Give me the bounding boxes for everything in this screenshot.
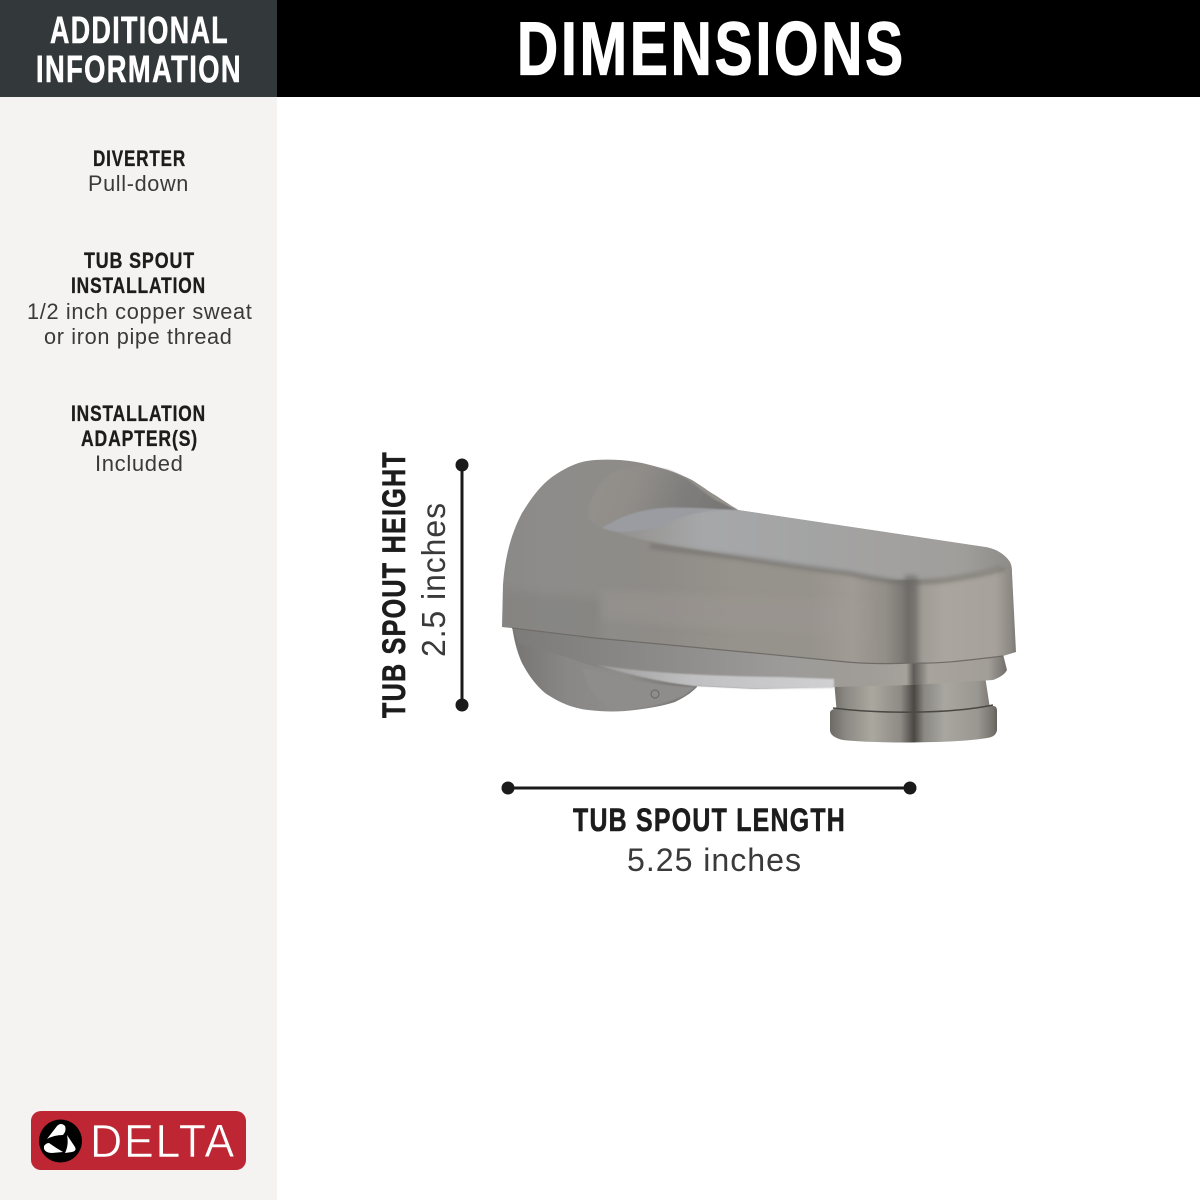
spec: tub spout installation: 1/2 inch copper sweat bbox=[27, 299, 252, 324]
body bottom seam bbox=[512, 628, 1003, 664]
spec: tub spout installation: or iron pipe thread bbox=[44, 324, 232, 349]
spec: tub spout installation: TUB SPOUT bbox=[84, 248, 195, 273]
spec: installation adapters: INSTALLATION bbox=[71, 401, 206, 426]
dark vertical reflection bbox=[905, 575, 917, 665]
length label bbox=[573, 802, 846, 878]
spec: tub spout installation: INSTALLATION bbox=[71, 273, 206, 298]
header: dimensions bbox=[277, 0, 1200, 97]
header: additional information: INFORMATION bbox=[36, 49, 242, 91]
wall plate lower part bbox=[512, 620, 700, 712]
sidebar panel bbox=[0, 97, 277, 1200]
height dimension line bbox=[456, 458, 468, 712]
spec: installation adapters: ADAPTER(S) bbox=[81, 426, 198, 451]
nozzle ring bbox=[830, 706, 997, 742]
lower scoop on wall plate bbox=[583, 668, 696, 709]
length label: TUB SPOUT LENGTH bbox=[573, 802, 846, 838]
delta logo: DELTA bbox=[90, 1115, 236, 1167]
delta logo bbox=[31, 1111, 246, 1170]
groove bbox=[833, 705, 993, 712]
spec: diverter: Pull-down bbox=[88, 171, 189, 196]
logo stamp on plate bbox=[651, 690, 659, 698]
underside light streak bbox=[597, 665, 834, 689]
length dimension line bbox=[502, 782, 916, 794]
ridge shadow bbox=[650, 546, 1005, 582]
nozzle neck bbox=[834, 676, 991, 715]
lip under the body bbox=[513, 627, 1007, 689]
height label: 2.5 inches bbox=[415, 502, 452, 657]
tub spout product illustration bbox=[495, 450, 1025, 742]
spec: diverter bbox=[88, 146, 189, 196]
header: additional information: ADDITIONAL bbox=[50, 10, 229, 52]
top face bbox=[610, 505, 1012, 580]
length label: 5.25 inches bbox=[627, 842, 802, 878]
header: dimensions: DIMENSIONS bbox=[517, 6, 906, 90]
spec: tub spout installation bbox=[27, 248, 252, 349]
header: additional information bbox=[0, 0, 277, 97]
spec: installation adapters bbox=[71, 401, 206, 476]
spec: diverter: DIVERTER bbox=[93, 146, 186, 171]
spout body bbox=[502, 460, 1016, 663]
height label bbox=[376, 451, 452, 718]
spec: installation adapters: Included bbox=[95, 451, 184, 476]
front highlight band bbox=[600, 590, 870, 640]
scoop blue wedge bbox=[602, 508, 722, 532]
left lower shadow bbox=[502, 594, 511, 628]
scoop recess bbox=[588, 467, 738, 528]
height label: TUB SPOUT HEIGHT bbox=[376, 451, 412, 718]
